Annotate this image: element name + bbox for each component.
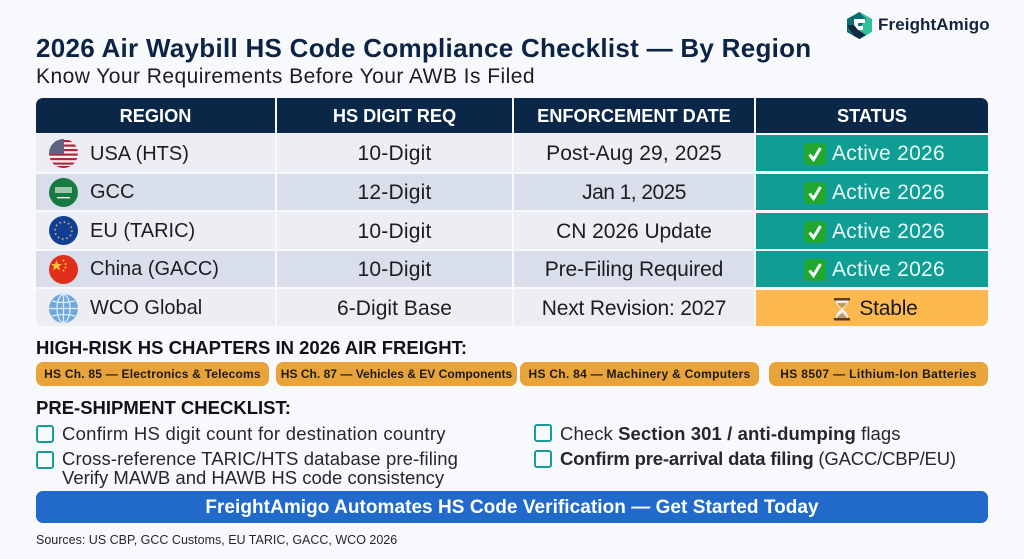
cell: EU digits <box>277 212 512 249</box>
call-to-action banner: FreightAmigo Automates HS Code Verification — Get Started Today <box>205 496 819 518</box>
icon: FreightAmigo hexagon mark <box>847 12 872 39</box>
cell: USA digits <box>277 134 512 172</box>
cell: China digits: 10-Digit <box>358 258 431 281</box>
cell: WCO enforcement <box>514 289 754 326</box>
logo wordmark: FreightAmigo <box>878 15 990 34</box>
table header: HS digit requirement <box>277 98 512 133</box>
status: USA active <box>756 135 988 171</box>
icon: EU flag <box>49 216 78 245</box>
call-to-action banner <box>36 491 988 523</box>
row background: USA <box>36 134 275 172</box>
pill: HS Ch. 85: HS Ch. 85 — Electronics & Telecoms <box>44 367 261 381</box>
status: WCO stable <box>756 290 988 326</box>
title: 2026 Air Waybill HS Code Compliance Checklist — By Region <box>36 33 811 63</box>
cell: USA enforcement <box>514 134 754 172</box>
cell: EU digits: 10-Digit <box>358 220 431 242</box>
status: EU active <box>756 213 988 249</box>
cell: GCC digits: 12-Digit <box>358 181 431 204</box>
row background: EU <box>36 212 275 249</box>
pill: HS Ch. 84 <box>520 362 759 386</box>
heading: high-risk HS chapters: HIGH-RISK HS CHAPTERS IN 2026 AIR FREIGHT: <box>36 337 467 358</box>
cell: China enforcement: Pre-Filing Required <box>545 258 723 281</box>
label: USA: USA (HTS) <box>90 143 189 165</box>
table header: region: REGION <box>120 106 191 126</box>
pill: HS Ch. 85 <box>36 362 269 386</box>
table header: status <box>756 98 988 133</box>
checklist item: cross-reference and verify: Cross-reference TARIC/HTS database pre-filing <box>62 448 458 469</box>
sources: Sources: US CBP, GCC Customs, EU TARIC, GACC, WCO 2026 <box>36 533 397 547</box>
pill: HS 8507 <box>769 362 988 386</box>
pill: HS Ch. 84: HS Ch. 84 — Machinery & Computers <box>529 367 750 381</box>
status: WCO stable: Stable <box>859 297 918 320</box>
cell: GCC enforcement: Jan 1, 2025 <box>582 181 686 204</box>
status: USA active: Active 2026 <box>832 142 945 165</box>
label: WCO: WCO Global <box>90 297 202 319</box>
label: EU: EU (TARIC) <box>90 220 195 242</box>
cell: EU enforcement <box>514 212 754 249</box>
cell: GCC enforcement <box>514 174 754 210</box>
cell: China enforcement <box>514 251 754 287</box>
cell: WCO digits <box>277 289 512 326</box>
row background: GCC <box>36 174 275 210</box>
checklist item: cross-reference and verify: Verify MAWB and HAWB HS code consistency <box>62 467 444 488</box>
cell: USA digits: 10-Digit <box>358 142 431 165</box>
cell: EU enforcement: CN 2026 Update <box>556 220 712 242</box>
checklist item: digit count: Confirm HS digit count for destination country <box>62 423 446 444</box>
status: GCC active: Active 2026 <box>832 181 945 204</box>
table header: status: STATUS <box>837 106 907 126</box>
row background: WCO <box>36 289 275 326</box>
table header: enforcement date: ENFORCEMENT DATE <box>537 106 731 126</box>
logo: FreightAmigo <box>847 12 990 39</box>
table header: enforcement date <box>514 98 754 133</box>
cell: USA enforcement: Post-Aug 29, 2025 <box>546 142 722 165</box>
cell: WCO enforcement: Next Revision: 2027 <box>542 296 726 320</box>
icon: USA flag <box>49 139 78 168</box>
status: GCC active <box>756 174 988 210</box>
icon: globe <box>49 294 78 323</box>
cell: China digits <box>277 251 512 287</box>
label: China: China (GACC) <box>90 258 219 280</box>
status: EU active: Active 2026 <box>832 220 945 243</box>
status: China active <box>756 251 988 287</box>
cell: GCC digits <box>277 174 512 210</box>
icon: China flag <box>49 255 78 284</box>
table header: region <box>36 98 275 133</box>
checklist item: pre-arrival data: Confirm pre-arrival data filing (GACC/CBP/EU) <box>560 448 956 469</box>
status: China active: Active 2026 <box>832 258 945 281</box>
checklist item: Section 301: Check Section 301 / anti-dumping flags <box>560 423 901 444</box>
label: GCC: GCC <box>90 181 134 203</box>
heading: pre-shipment checklist: PRE-SHIPMENT CHECKLIST: <box>36 397 291 418</box>
pill: HS 8507: HS 8507 — Lithium-Ion Batteries <box>780 367 977 381</box>
cell: WCO digits: 6-Digit Base <box>337 296 452 320</box>
row background: China <box>36 251 275 287</box>
checklist item: cross-reference and verify <box>36 448 458 488</box>
pill: HS Ch. 87: HS Ch. 87 — Vehicles & EV Components <box>281 367 512 381</box>
icon: GCC flag <box>49 178 78 207</box>
subtitle: Know Your Requirements Before Your AWB Is Filed <box>36 65 535 88</box>
compliance table <box>36 98 988 326</box>
table header: HS digit requirement: HS DIGIT REQ <box>333 106 456 126</box>
pill: HS Ch. 87 <box>276 362 517 386</box>
